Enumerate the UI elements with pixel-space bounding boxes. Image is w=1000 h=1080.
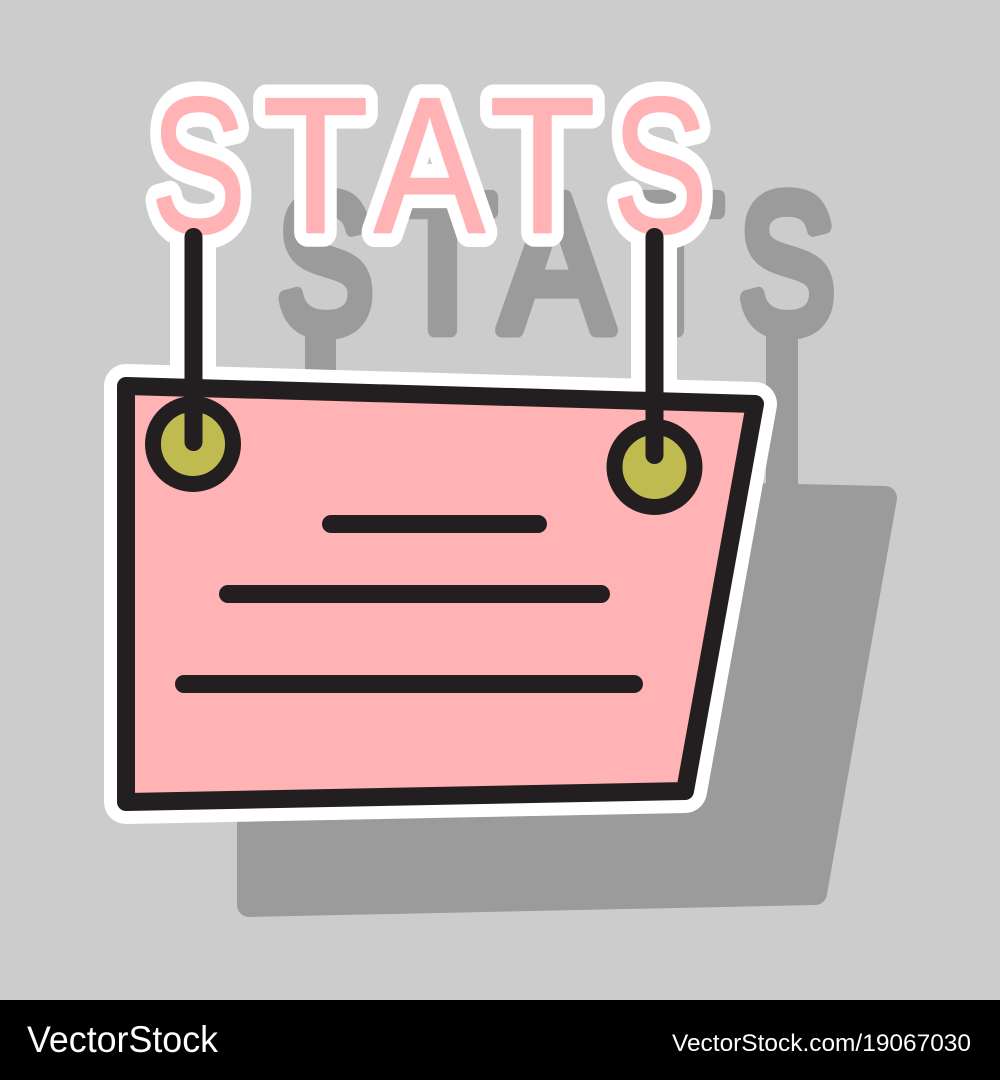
right eyelet <box>614 427 694 507</box>
text lines on sign <box>184 524 634 684</box>
title: STATS <box>151 57 708 274</box>
title letters with white outline <box>151 57 708 274</box>
shadow: sign <box>249 484 885 905</box>
footer brand: VectorStock <box>27 1019 218 1060</box>
title letters with white outline: S <box>151 57 246 273</box>
left rod <box>184 237 202 442</box>
left eyelet <box>153 404 233 484</box>
footer bar <box>0 1000 1000 1080</box>
shadow: STATS word: T <box>616 156 723 371</box>
title letters with white outline: T <box>489 58 596 273</box>
shadow: STATS word: S <box>278 155 373 371</box>
title letters pink weight: S <box>151 57 246 273</box>
title letters pink weight: T <box>262 58 369 273</box>
title letters with white outline: T <box>262 58 369 273</box>
shadow: STATS word: T <box>389 156 496 371</box>
shadow: STATS word <box>278 155 835 372</box>
right rod <box>646 237 664 455</box>
title letters pink weight: A <box>374 58 485 274</box>
drop shadow <box>249 155 885 905</box>
footer image id: VectorStock.com/19067030 <box>672 1030 971 1057</box>
title letters with white outline: S <box>612 57 708 273</box>
shadow: STATS word: S <box>739 155 835 371</box>
title letters with white outline: A <box>374 58 485 274</box>
title letters pink weight: S <box>612 57 708 273</box>
shadow: rods <box>305 320 798 500</box>
sign board <box>126 386 755 802</box>
shadow: STATS word: A <box>501 156 612 372</box>
title letters pink weight: T <box>489 58 596 273</box>
rods white outline <box>170 225 677 415</box>
title letters pink weight <box>151 57 708 274</box>
